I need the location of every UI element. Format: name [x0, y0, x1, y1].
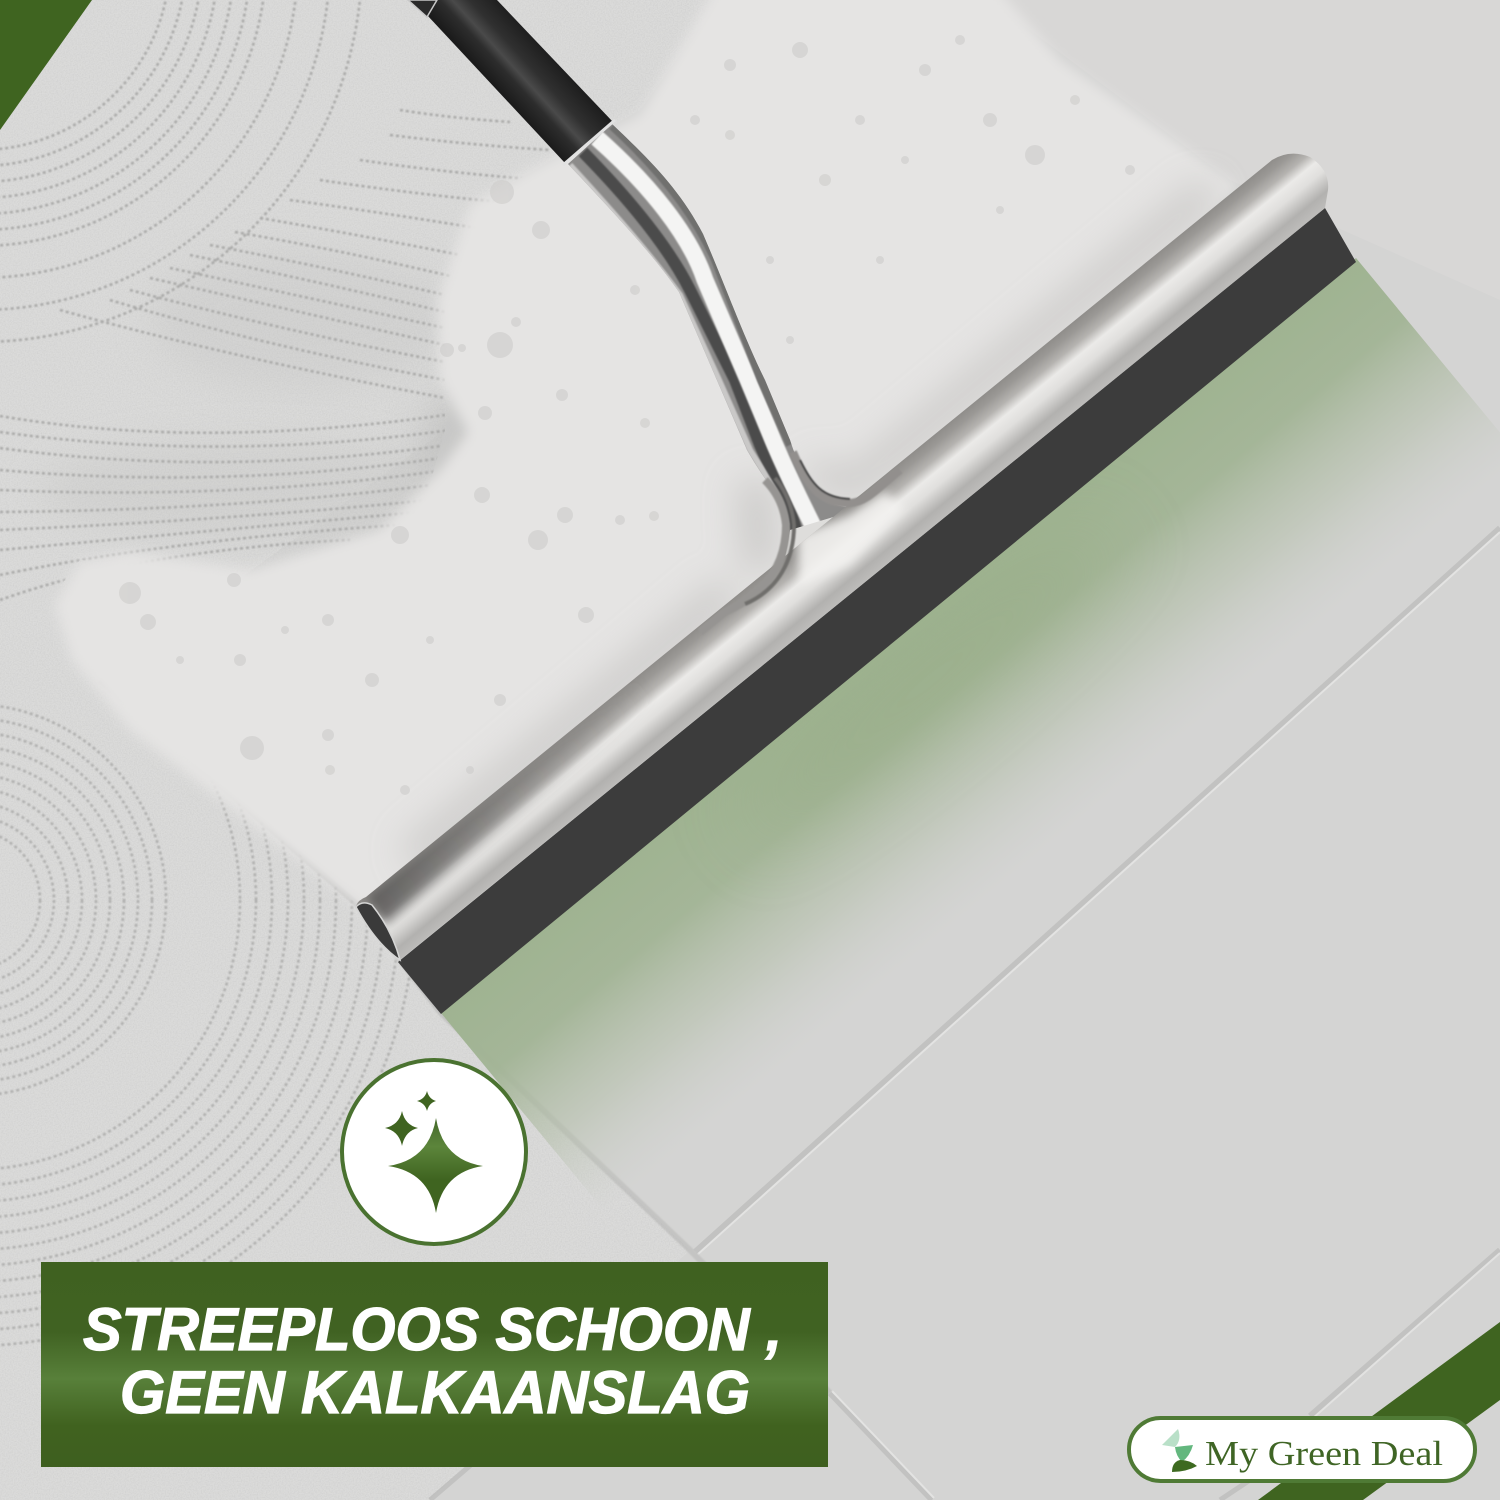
black grip	[427, 0, 613, 163]
headline line 2: GEEN KALKAANSLAG	[120, 1359, 750, 1426]
top ring	[408, 0, 437, 17]
headline line 1: STREEPLOOS SCHOON ,	[83, 1296, 782, 1363]
corner accent: bottom right band	[1258, 1322, 1500, 1500]
bar end cap	[356, 903, 400, 960]
bar shading and highlight	[366, 492, 905, 925]
clean zone: green gradient	[441, 258, 1500, 1213]
logo pill	[1129, 1418, 1475, 1481]
foam	[55, 0, 1238, 960]
metal bar	[356, 154, 1328, 960]
logo text: My Green Deal	[1205, 1434, 1443, 1473]
icon: large star	[388, 1118, 483, 1213]
grout lines	[100, 528, 1500, 1500]
soft darker swirl zones	[150, 250, 450, 390]
textured swirls: lower left tile	[0, 704, 411, 1346]
logo mark: leaves	[1162, 1429, 1197, 1472]
fine grain on textured tiles	[0, 0, 691, 1500]
squeegee	[356, 0, 1356, 1014]
icon: sparkle badge	[342, 1060, 526, 1244]
metal neck	[568, 124, 897, 610]
textured swirls: upper left tile	[0, 0, 550, 600]
rubber blade	[398, 208, 1356, 1014]
icon: small star	[417, 1091, 436, 1111]
grip ring	[563, 120, 615, 165]
foam bubbles	[119, 35, 1135, 795]
foam shadow beside neck and bar	[410, 190, 1210, 860]
icon: medium star	[385, 1111, 418, 1146]
corner accent: top left	[0, 0, 92, 130]
T-junction lips	[700, 452, 900, 632]
headline banner	[41, 1262, 828, 1467]
